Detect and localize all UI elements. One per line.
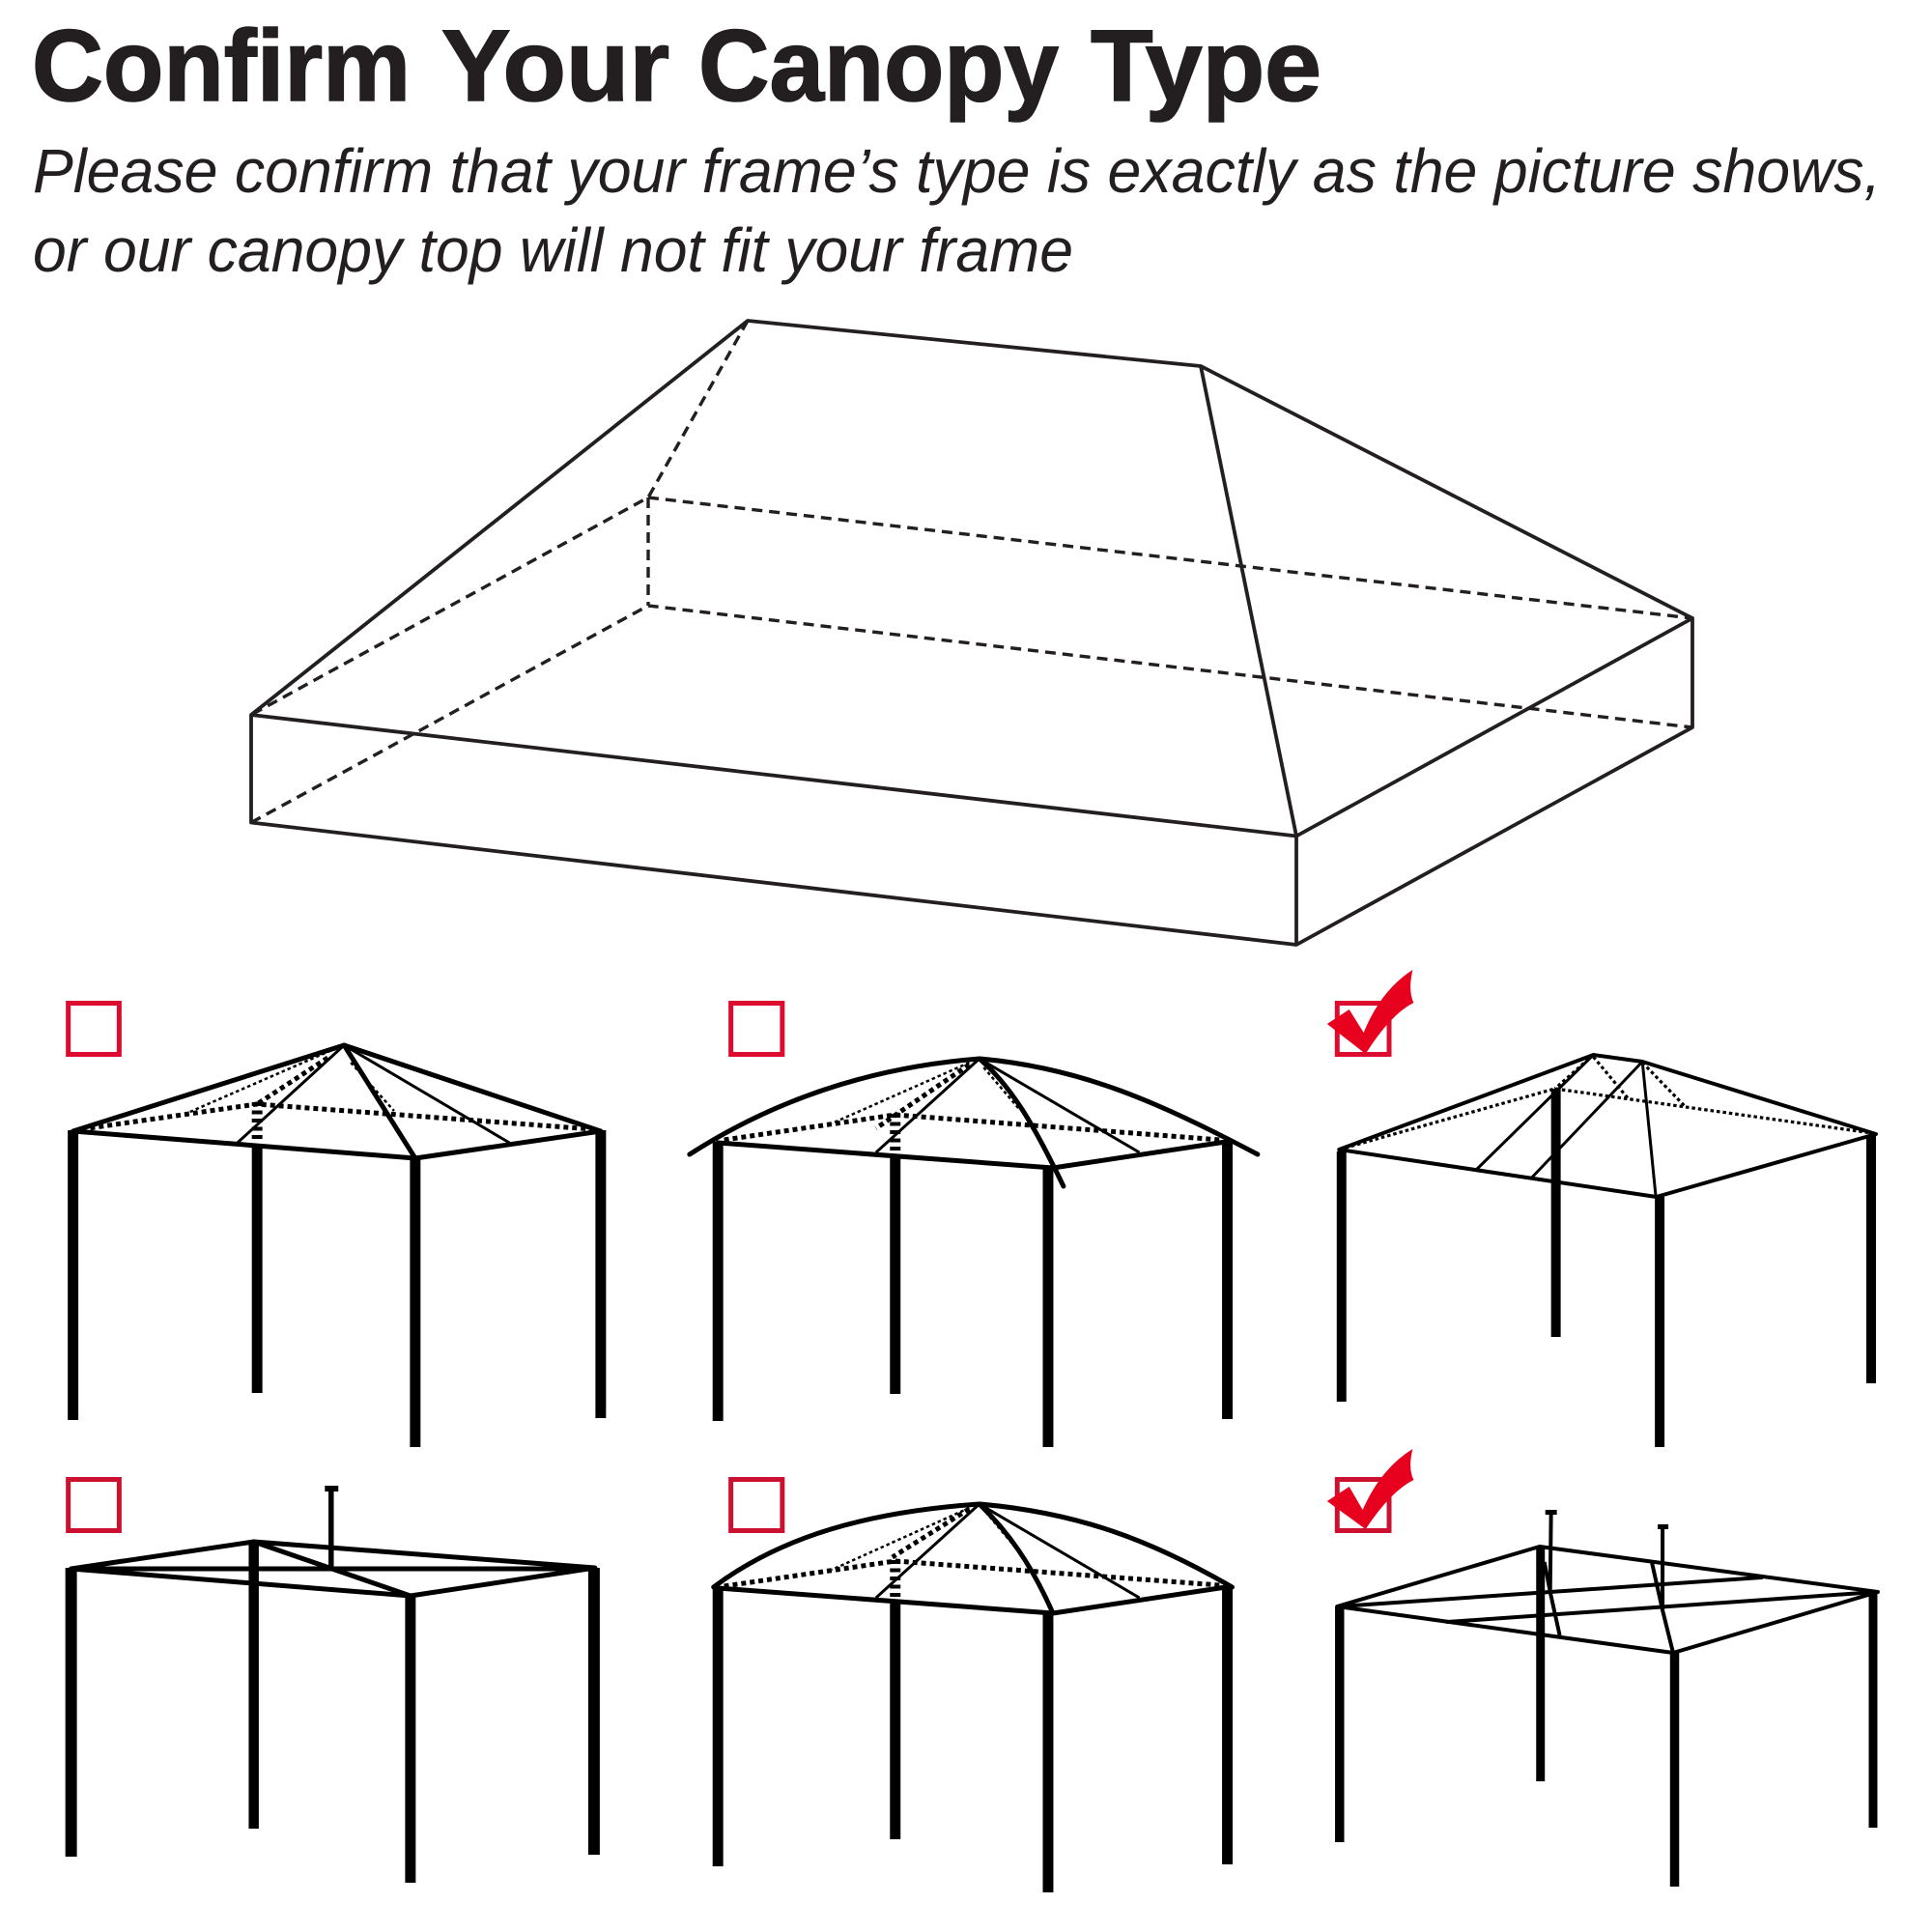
posts xyxy=(1342,1089,1871,1447)
frame option 3: correct, flat ridge roof xyxy=(1327,970,1876,1447)
posts xyxy=(718,1114,1228,1447)
subtitle text block xyxy=(33,136,1881,285)
roof frame xyxy=(714,1504,1233,1613)
title: Confirm xyxy=(32,10,411,123)
checkbox: ticked xyxy=(1327,1449,1413,1530)
roof frame xyxy=(690,1059,1258,1186)
canopy top diagram xyxy=(251,321,1692,945)
checkbox: empty xyxy=(731,1480,782,1530)
frame option 2: curved roof with overhang xyxy=(690,1003,1258,1447)
support poles xyxy=(1545,1510,1673,1653)
frame option 1: peaked roof xyxy=(69,1003,601,1447)
checkbox: empty xyxy=(69,1003,119,1055)
subtitle text block: or our canopy top will not fit your frame xyxy=(33,215,1073,285)
roof frame xyxy=(71,1542,595,1596)
roof frame xyxy=(1337,1547,1878,1653)
posts xyxy=(1340,1548,1873,1887)
checkbox: empty xyxy=(69,1480,119,1530)
subtitle text block: Please confirm that your frame’s type is exactly as the picture shows, xyxy=(33,136,1881,206)
roof frame xyxy=(1339,1055,1876,1197)
posts xyxy=(71,1541,594,1883)
frame option 6: correct, flat roof with two poles xyxy=(1327,1449,1878,1887)
posts xyxy=(718,1560,1228,1892)
checkbox: empty xyxy=(731,1003,782,1055)
title: Type xyxy=(1091,10,1321,123)
title: Canopy xyxy=(698,10,1059,123)
frame option 4: flat roof with centre pole xyxy=(69,1480,595,1883)
posts xyxy=(73,1102,601,1447)
checkbox: ticked xyxy=(1327,970,1413,1055)
frame option 5: curved roof without overhang xyxy=(714,1480,1233,1892)
title: Your xyxy=(441,10,669,123)
roof frame xyxy=(73,1045,601,1158)
centre pole xyxy=(325,1486,338,1568)
